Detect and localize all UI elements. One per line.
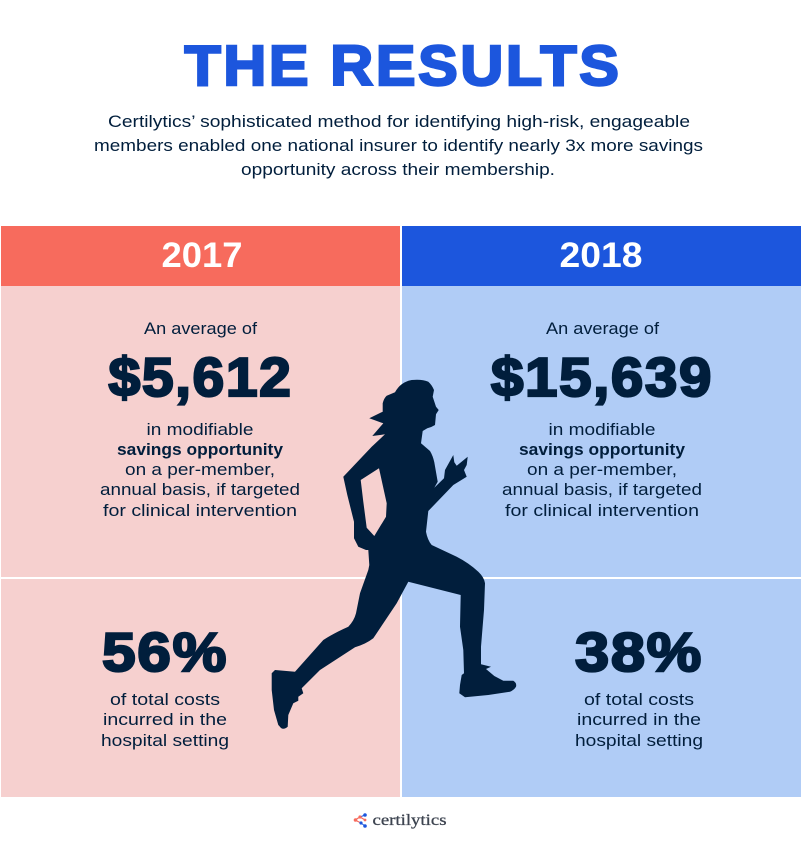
2017 panel background lower xyxy=(1,579,400,797)
panel: 2018 xyxy=(402,226,801,797)
2018 panel background upper xyxy=(402,286,801,577)
2018 savings block: for clinical intervention xyxy=(505,501,699,520)
2018 savings block: annual basis, if targeted xyxy=(502,480,702,499)
2017 heading: 2017 xyxy=(162,236,242,275)
icon: certilytics mark xyxy=(354,813,367,828)
wordmark: certilytics xyxy=(372,812,446,829)
2017 hospital cost block: of total costs xyxy=(110,690,220,709)
intro text: Certilytics’ sophisticated method for identifying high-risk, engageable xyxy=(108,112,690,131)
2018 hospital cost block: 38% xyxy=(575,621,703,683)
icon: runner silhouette xyxy=(272,380,516,729)
2018 hospital cost block xyxy=(575,621,703,750)
2018 header bar xyxy=(402,226,801,286)
2017 savings block: $5,612 xyxy=(108,346,292,408)
2017 header bar xyxy=(1,226,400,286)
2018 savings block: on a per-member, xyxy=(527,460,677,479)
2018 heading: 2018 xyxy=(560,236,642,275)
2017 savings block: An average of xyxy=(144,319,257,338)
2018 savings block: $15,639 xyxy=(491,346,713,408)
2017 savings block: in modifiable xyxy=(146,420,254,439)
2017 savings block: on a per-member, xyxy=(125,460,275,479)
2018 savings block xyxy=(491,319,713,520)
2018 hospital cost block: incurred in the xyxy=(577,710,701,729)
2018 savings block: savings opportunity xyxy=(519,440,686,459)
panel: 2017 xyxy=(1,226,400,797)
2017 savings block: annual basis, if targeted xyxy=(100,480,300,499)
2017 savings block: for clinical intervention xyxy=(103,501,297,520)
2018 savings block: An average of xyxy=(546,319,659,338)
2017 savings block xyxy=(100,319,300,520)
2018 savings block: in modifiable xyxy=(548,420,656,439)
intro text: members enabled one national insurer to identify nearly 3x more savings xyxy=(94,136,703,155)
2017 savings block: savings opportunity xyxy=(117,440,284,459)
2018 hospital cost block: hospital setting xyxy=(575,731,703,750)
title: THE RESULTS xyxy=(184,34,622,98)
2017 hospital cost block: 56% xyxy=(102,621,228,683)
2017 hospital cost block xyxy=(101,621,229,750)
2017 panel background upper xyxy=(1,286,400,577)
2017 hospital cost block: hospital setting xyxy=(101,731,229,750)
2017 hospital cost block: incurred in the xyxy=(103,710,227,729)
2018 panel background lower xyxy=(402,579,801,797)
2018 hospital cost block: of total costs xyxy=(584,690,694,709)
intro text: opportunity across their membership. xyxy=(241,160,555,179)
intro text xyxy=(94,112,703,179)
logo: certilytics xyxy=(354,812,446,829)
